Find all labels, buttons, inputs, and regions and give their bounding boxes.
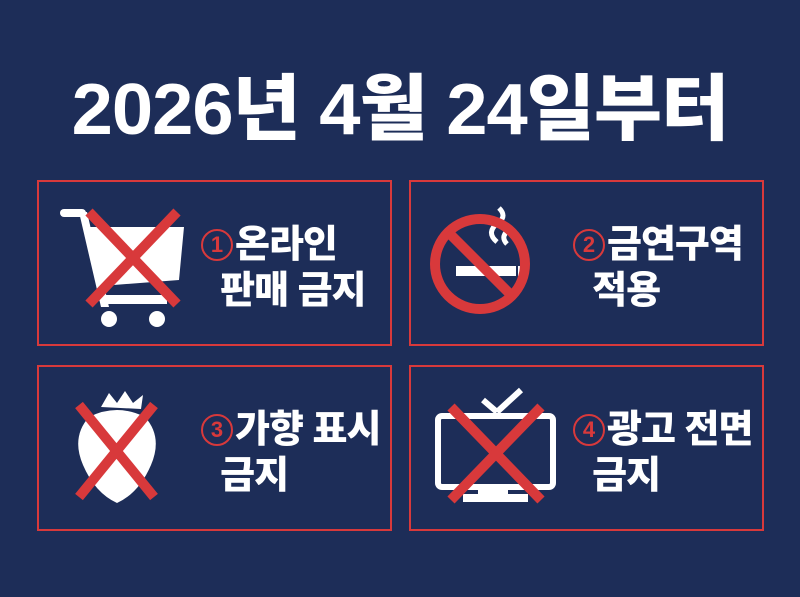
icon: crossed cart	[60, 208, 184, 327]
panel: no smoking	[409, 180, 764, 346]
text: 금연구역 적용	[573, 224, 743, 312]
text: 온라인 판매 금지	[201, 224, 366, 312]
text: 가향 표시 금지: 3	[211, 417, 223, 442]
panel: advertising ban	[409, 365, 764, 531]
text: 금연구역 적용: 금연구역	[607, 224, 743, 266]
text: 광고 전면 금지: 4	[583, 417, 595, 442]
text: 가향 표시 금지: 가향 표시	[235, 409, 380, 451]
title: 2026년 4월 24일부터	[72, 70, 728, 150]
panel: online sales ban	[37, 180, 392, 346]
icon: no smoking sign	[430, 206, 530, 314]
text: 광고 전면 금지	[573, 409, 752, 497]
text: 광고 전면 금지: 금지	[592, 455, 660, 497]
text: 온라인 판매 금지: 1	[211, 232, 223, 257]
text: 금연구역 적용: 적용	[592, 270, 660, 312]
text: 금연구역 적용: 2	[583, 232, 595, 257]
text: 온라인 판매 금지: 온라인	[235, 224, 337, 266]
text: 가향 표시 금지	[201, 409, 380, 497]
icon: crossed strawberry	[75, 391, 158, 503]
text: 가향 표시 금지: 금지	[220, 455, 288, 497]
text: 온라인 판매 금지: 판매 금지	[220, 270, 366, 312]
text: 광고 전면 금지: 광고 전면	[607, 409, 752, 451]
panel: flavor label ban	[37, 365, 392, 531]
icon: crossed TV	[435, 388, 556, 504]
